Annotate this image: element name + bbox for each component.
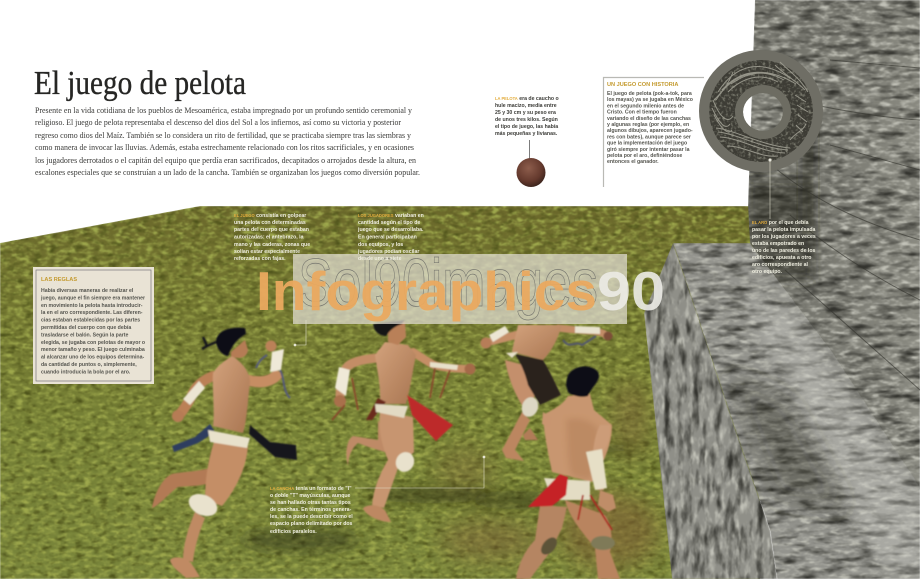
history panel: entonces el ganador. xyxy=(607,159,659,165)
panel: las reglas: da cantidad de puntos o, simplemente, xyxy=(41,362,137,368)
panel: las reglas: Había diversas maneras de realizar el xyxy=(41,288,134,294)
panel: las reglas: juego, aunque el fin siempre era mantener xyxy=(40,295,145,301)
caption: la cancha xyxy=(270,486,353,535)
history panel: giró siempre por intentar pasar la xyxy=(607,147,690,153)
caption: el juego: autorizadas: el antebrazo, la xyxy=(234,234,304,240)
caption: el aro: EL ARO por el que debía xyxy=(752,220,809,226)
caption: la cancha: espacio plano delimitado por dos xyxy=(270,521,353,527)
caption: la cancha: les, se la puede describir como el xyxy=(270,514,353,520)
platform side face xyxy=(644,243,777,579)
caption: la cancha: edificios paralelos. xyxy=(270,529,317,535)
caption: los jugadores xyxy=(357,213,424,262)
caption: los jugadores: juego que se desarrollaba. xyxy=(357,227,424,233)
caption: el aro: uno de las paredes de los xyxy=(752,248,816,254)
watermark: Infographics xyxy=(256,260,597,322)
panel: las reglas: en movimiento la pelota hasta introducir- xyxy=(41,303,143,309)
caption: el juego: una pelota con determinadas xyxy=(234,220,306,226)
intro text: religioso. El juego de pelota representaba el descenso del dios del Sol a los infiernos, así como su victoria y posterior xyxy=(35,118,401,127)
stone platform xyxy=(644,243,920,579)
caption: el aro xyxy=(752,220,816,275)
stone ring xyxy=(699,50,823,172)
panel: las reglas: cuando introducía la bola por el aro. xyxy=(41,369,131,375)
intro text: los jugadores derrotados o el capitán del equipo que perdía eran sacrificados, decapitados o arrojados desde la altura, en xyxy=(35,156,417,165)
panel: las reglas: elegida, se jugaba con pelotas de mayor o xyxy=(41,340,145,346)
history panel: UN JUEGO CON HISTORIA xyxy=(607,82,678,88)
caption: la cancha: de canchas. En términos genera- xyxy=(270,507,352,513)
caption: el juego: partes del cuerpo que estaban xyxy=(234,227,309,233)
stone back wall xyxy=(748,0,920,490)
panel: las reglas: permitidas del cuerpo con que debía xyxy=(41,325,131,331)
caption: el juego: solían estar especialmente xyxy=(234,249,300,255)
caption: el juego: mano y las caderas, zonas que xyxy=(234,242,310,248)
caption: el aro: aro correspondiente al xyxy=(752,262,808,268)
leader lines xyxy=(294,159,771,488)
caption: la cancha: LA CANCHA tenía un formato de "I" xyxy=(270,486,352,492)
panel: las reglas: al alcanzar uno de los equipos determina- xyxy=(41,355,144,361)
player 3 xyxy=(480,325,612,461)
platform top surface xyxy=(673,243,920,579)
ball caption xyxy=(495,96,559,137)
ball caption: el tipo de juego, las había xyxy=(495,124,558,130)
ball caption: LA PELOTA era de caucho o xyxy=(495,96,559,102)
ball xyxy=(516,140,546,187)
caption: los jugadores: jugadores podían oscilar xyxy=(357,249,419,255)
history panel: El juego de pelota (pok-a-tok, para xyxy=(607,91,692,97)
history panel xyxy=(604,78,704,187)
panel: las reglas: la en el aro correspondiente. Las diferen- xyxy=(41,310,143,316)
history panel: variando el diseño de las canchas xyxy=(607,116,691,122)
caption: el aro: pasar la pelota impulsada xyxy=(752,227,816,233)
caption: la cancha: se han hallado otras tantas tipos xyxy=(270,500,351,506)
history panel: los mayas) ya se jugaba en México xyxy=(607,97,693,103)
ball caption: hule macizo, media entre xyxy=(495,103,557,109)
panel: las reglas xyxy=(33,267,154,384)
panel: las reglas: menor tamaño y peso. El juego culminaba xyxy=(41,347,145,353)
watermark: 90 xyxy=(597,260,665,322)
ball caption: 25 y 30 cm y su peso era xyxy=(495,110,556,116)
intro text xyxy=(35,106,420,177)
ball caption: de unos tres kilos. Según xyxy=(495,117,558,123)
caption: la cancha: o doble "T" mayúsculas, aunque xyxy=(270,493,351,499)
caption: los jugadores: desde uno a siete xyxy=(358,256,402,262)
intro text: regreso como dios del Maíz. También se lo considera un rito de fertilidad, que se practicaba siempre tras las siembras y xyxy=(35,131,412,140)
history panel: res con bates), aunque parece ser xyxy=(607,134,691,140)
history panel: Cristo. Con el tiempo fueron xyxy=(607,110,677,116)
caption: el aro: estaba empotrado en xyxy=(752,241,804,247)
caption: el aro: edificios, apuesta a otro xyxy=(752,255,811,261)
title: El juego de pelota xyxy=(34,65,246,102)
history panel: en el segundo milenio antes de xyxy=(607,103,684,109)
ball caption: más pequeñas y livianas. xyxy=(495,131,558,137)
caption: el juego: EL JUEGO consistía en golpear xyxy=(234,213,306,219)
player 4 xyxy=(516,366,620,579)
history panel: algunos dibujos, aparecen jugado- xyxy=(607,128,693,134)
caption: el juego: reforzadas con fajas. xyxy=(234,256,286,262)
intro text: como manera de invocar las lluvias. Además, estaba estrechamente relacionado con los ritos sacrificiales, y en ocasiones xyxy=(35,143,414,152)
history panel: y algunas reglas (por ejemplo, en xyxy=(607,122,689,128)
panel: las reglas: LAS REGLAS xyxy=(41,277,77,283)
caption: el juego xyxy=(234,213,310,262)
caption: el aro: otro equipo. xyxy=(752,269,783,275)
intro text: Presente en la vida cotidiana de los pueblos de Mesoamérica, estaba impregnado por un profundo sentido ceremonial y xyxy=(35,106,413,115)
grass playing field xyxy=(0,206,760,579)
player 1 xyxy=(152,328,297,578)
intro text: escalones especiales que se construían a un lado de la cancha. También se organizaban los juegos como diversión popular. xyxy=(35,168,420,177)
caption: los jugadores: En general participaban xyxy=(358,234,417,240)
caption: el aro: por los jugadores a veces xyxy=(752,234,816,240)
caption: los jugadores: dos equipos, y los xyxy=(358,242,403,248)
panel: las reglas: cias estaban establecidas por las partes xyxy=(41,318,140,324)
history panel: que la implementación del juego xyxy=(607,141,687,147)
panel: las reglas: trasladarse el balón. Según la parte xyxy=(41,332,128,338)
caption: los jugadores: cantidad según el tipo de xyxy=(358,220,420,226)
history panel: pelota por el aro, definiéndose xyxy=(607,153,682,159)
watermark: Sol90images xyxy=(298,245,598,321)
caption: los jugadores: LOS JUGADORES variaban en xyxy=(358,213,424,219)
player 2 xyxy=(332,320,476,522)
